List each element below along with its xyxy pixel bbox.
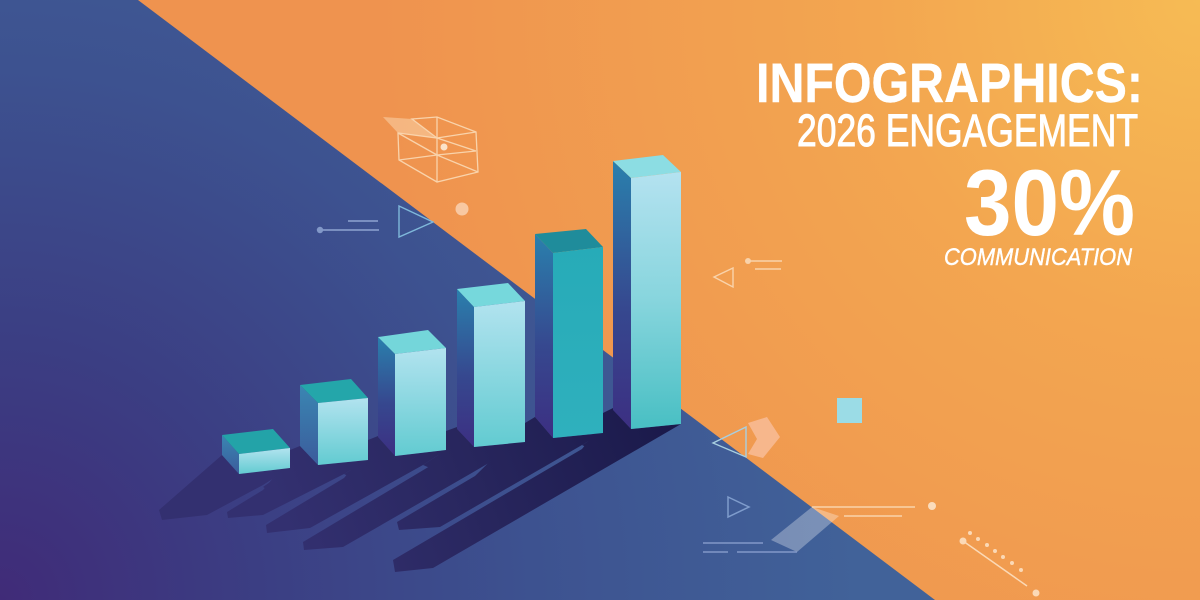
icon: peach dot [456, 202, 468, 216]
icon: translucent parallelogram [771, 507, 839, 552]
bar 4 [457, 283, 525, 447]
icon: peach pentagon arrow [748, 417, 780, 458]
background: blue diagonal panel [0, 0, 935, 600]
caption: COMMUNICATION [944, 244, 1133, 271]
bar 2 [300, 379, 368, 465]
bar 3 [378, 330, 446, 456]
bar shadows [159, 408, 681, 572]
icon: blue lines, lower [703, 543, 797, 552]
bar chart: isometric bars with shadows [159, 155, 681, 572]
bar 5 [535, 229, 603, 438]
icon: dotted connector [960, 531, 1040, 596]
bar 6 [613, 155, 681, 429]
icon: triangle with lines, right [714, 258, 782, 287]
big number: 30% [964, 150, 1135, 255]
title: INFOGRAPHICS: [756, 51, 1143, 114]
icon: peach lines with dot [812, 502, 936, 516]
icon: outlined triangle with lines, left [317, 206, 433, 237]
icon: light blue square [837, 398, 862, 423]
bar 1 [222, 429, 290, 474]
icon: wireframe cube [383, 117, 478, 182]
icon: triangle on the diagonal [713, 427, 746, 457]
icon: small triangle, lower [728, 497, 749, 517]
